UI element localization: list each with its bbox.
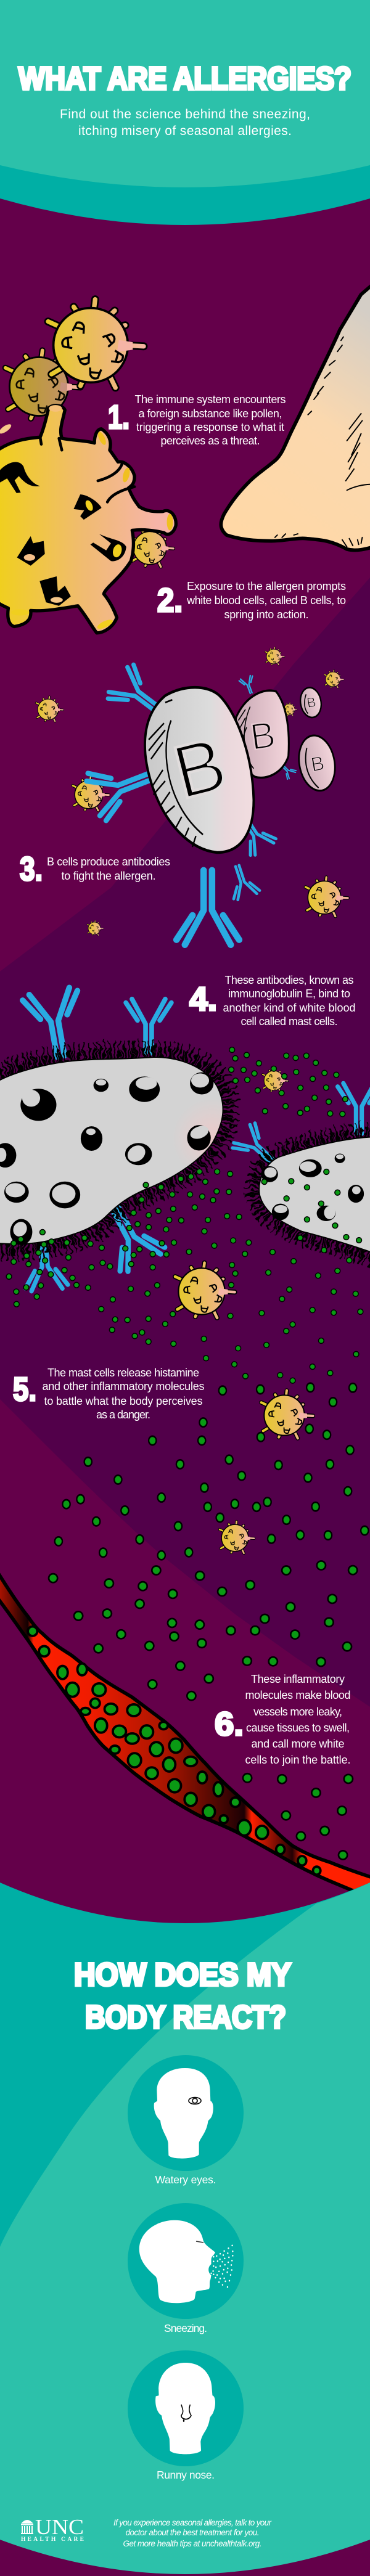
number 6: 6. — [215, 1706, 244, 1743]
footer note — [113, 2518, 271, 2548]
pollen: large grain — [0, 405, 176, 633]
subtitle: Find out the science behind the sneezing, — [60, 107, 310, 121]
step 1 — [108, 393, 286, 447]
bottom panel — [0, 1883, 370, 2576]
number 5: 5. — [13, 1371, 36, 1408]
step 5 — [13, 1367, 205, 1421]
number 3: 3. — [20, 851, 43, 888]
letter B mid: B — [248, 714, 278, 758]
molecules: upper field — [9, 1050, 360, 1381]
text: step 4: These antibodies, known as — [224, 974, 354, 986]
illustration: pollen grains, step 1 — [0, 300, 176, 633]
text: step 6: vessels more leaky, — [253, 1706, 342, 1718]
pollen: small dark grain — [6, 350, 81, 420]
step 2 — [157, 580, 346, 621]
symptom: sneezing — [128, 2203, 244, 2334]
mast cells — [0, 1057, 370, 1253]
logo wordmark: UNC — [35, 2515, 84, 2539]
mast cell hairs — [0, 1057, 370, 1253]
text: step 4 — [223, 974, 355, 1028]
B cell: top small — [298, 685, 324, 720]
text: step 6: cause tissues to swell, — [246, 1722, 350, 1734]
icon: old well — [21, 2520, 33, 2534]
pollen among histamine — [175, 1068, 313, 1553]
letter B small lower: B — [309, 751, 326, 776]
label: runny nose: Runny nose. — [157, 2469, 215, 2481]
histamine molecules — [9, 1050, 364, 1855]
label: sneezing: Sneezing. — [164, 2322, 207, 2334]
number 2: 2. — [157, 582, 183, 619]
symptom: runny nose — [128, 2350, 244, 2481]
footer note: doctor about the best treatment for you. — [126, 2528, 259, 2537]
text: step 6: These inflammatory — [251, 1673, 345, 1685]
pollen: medium grain — [48, 300, 144, 388]
header panel — [0, 0, 370, 225]
footer: bottom purple arc — [0, 2540, 370, 2576]
B cells — [145, 685, 340, 853]
text: step 1: triggering a response to what it — [136, 421, 284, 433]
step 4 — [189, 974, 355, 1028]
text: step 3 — [47, 856, 170, 882]
step 6 — [215, 1673, 350, 1766]
text: step 1: perceives as a threat. — [160, 435, 260, 447]
text: step 4: immunoglobulin E, bind to — [228, 987, 350, 1000]
heading: HOW DOES MY — [74, 1957, 291, 1993]
text: step 2: spring into action. — [224, 608, 308, 621]
letter B large: B — [165, 721, 234, 815]
text: step 4: cell called mast cells. — [240, 1015, 338, 1028]
text: step 3: to fight the allergen. — [62, 870, 155, 882]
number 1: 1. — [108, 399, 130, 436]
heading — [74, 1957, 291, 2035]
text: step 3: B cells produce antibodies — [47, 856, 170, 868]
molecules: middle field — [59, 1388, 364, 1555]
heading: BODY REACT? — [85, 2000, 286, 2035]
B cell: lower small — [294, 730, 340, 795]
text: step 2 — [186, 580, 346, 621]
text: step 1: a foreign substance like pollen, — [138, 407, 282, 420]
text: step 4: another kind of white blood — [223, 1002, 355, 1014]
antibodies on mast cells — [22, 986, 370, 1292]
B cell: mid — [236, 690, 289, 778]
pollen: grain by large spike — [131, 528, 173, 567]
subtitle: itching misery of seasonal allergies. — [78, 124, 292, 138]
letter B small top: B — [306, 694, 317, 711]
step 3 — [20, 851, 170, 888]
footer note: Get more health tips at unchealthtalk.org. — [123, 2539, 261, 2548]
mast cell: large — [0, 1057, 223, 1245]
label: watery eyes: Watery eyes. — [155, 2173, 216, 2186]
floating pollen near B cells — [36, 647, 348, 935]
blood vessel — [0, 1572, 370, 1899]
text: step 5 — [42, 1367, 205, 1421]
mast cell: small — [259, 1137, 370, 1253]
text: step 5: The mast cells release histamine — [47, 1367, 199, 1379]
text: step 5: as a danger. — [96, 1409, 150, 1421]
text: step 5: and other inflammatory molecules — [42, 1380, 205, 1392]
number 4: 4. — [189, 981, 217, 1018]
background: darker purple diagonal band — [0, 578, 370, 1707]
illustration: nose — [221, 280, 370, 550]
molecules: lower field — [53, 1566, 353, 1855]
subtitle — [60, 107, 310, 138]
text: step 1: The immune system encounters — [134, 393, 286, 406]
footer note: If you experience seasonal allergies, talk to your — [113, 2518, 271, 2527]
B cell: large — [145, 687, 253, 853]
text: step 6: molecules make blood — [245, 1689, 350, 1701]
symptom: watery eyes — [128, 2055, 244, 2186]
sneeze droplets — [212, 2246, 232, 2287]
logo: UNC Health Care — [21, 2515, 84, 2543]
text: step 6: and call more white — [252, 1738, 344, 1750]
text: step 6 — [245, 1673, 350, 1766]
text: step 1 — [134, 393, 286, 447]
text: step 6: cells to join the battle. — [245, 1754, 350, 1766]
logo subline: HEALTH CARE — [21, 2537, 84, 2543]
text: step 2: white blood cells, called B cells, to — [186, 594, 346, 607]
antibodies around B cells — [84, 663, 297, 945]
text: step 2: Exposure to the allergen prompts — [187, 580, 346, 592]
text: step 5: to battle what the body perceives — [44, 1395, 202, 1407]
